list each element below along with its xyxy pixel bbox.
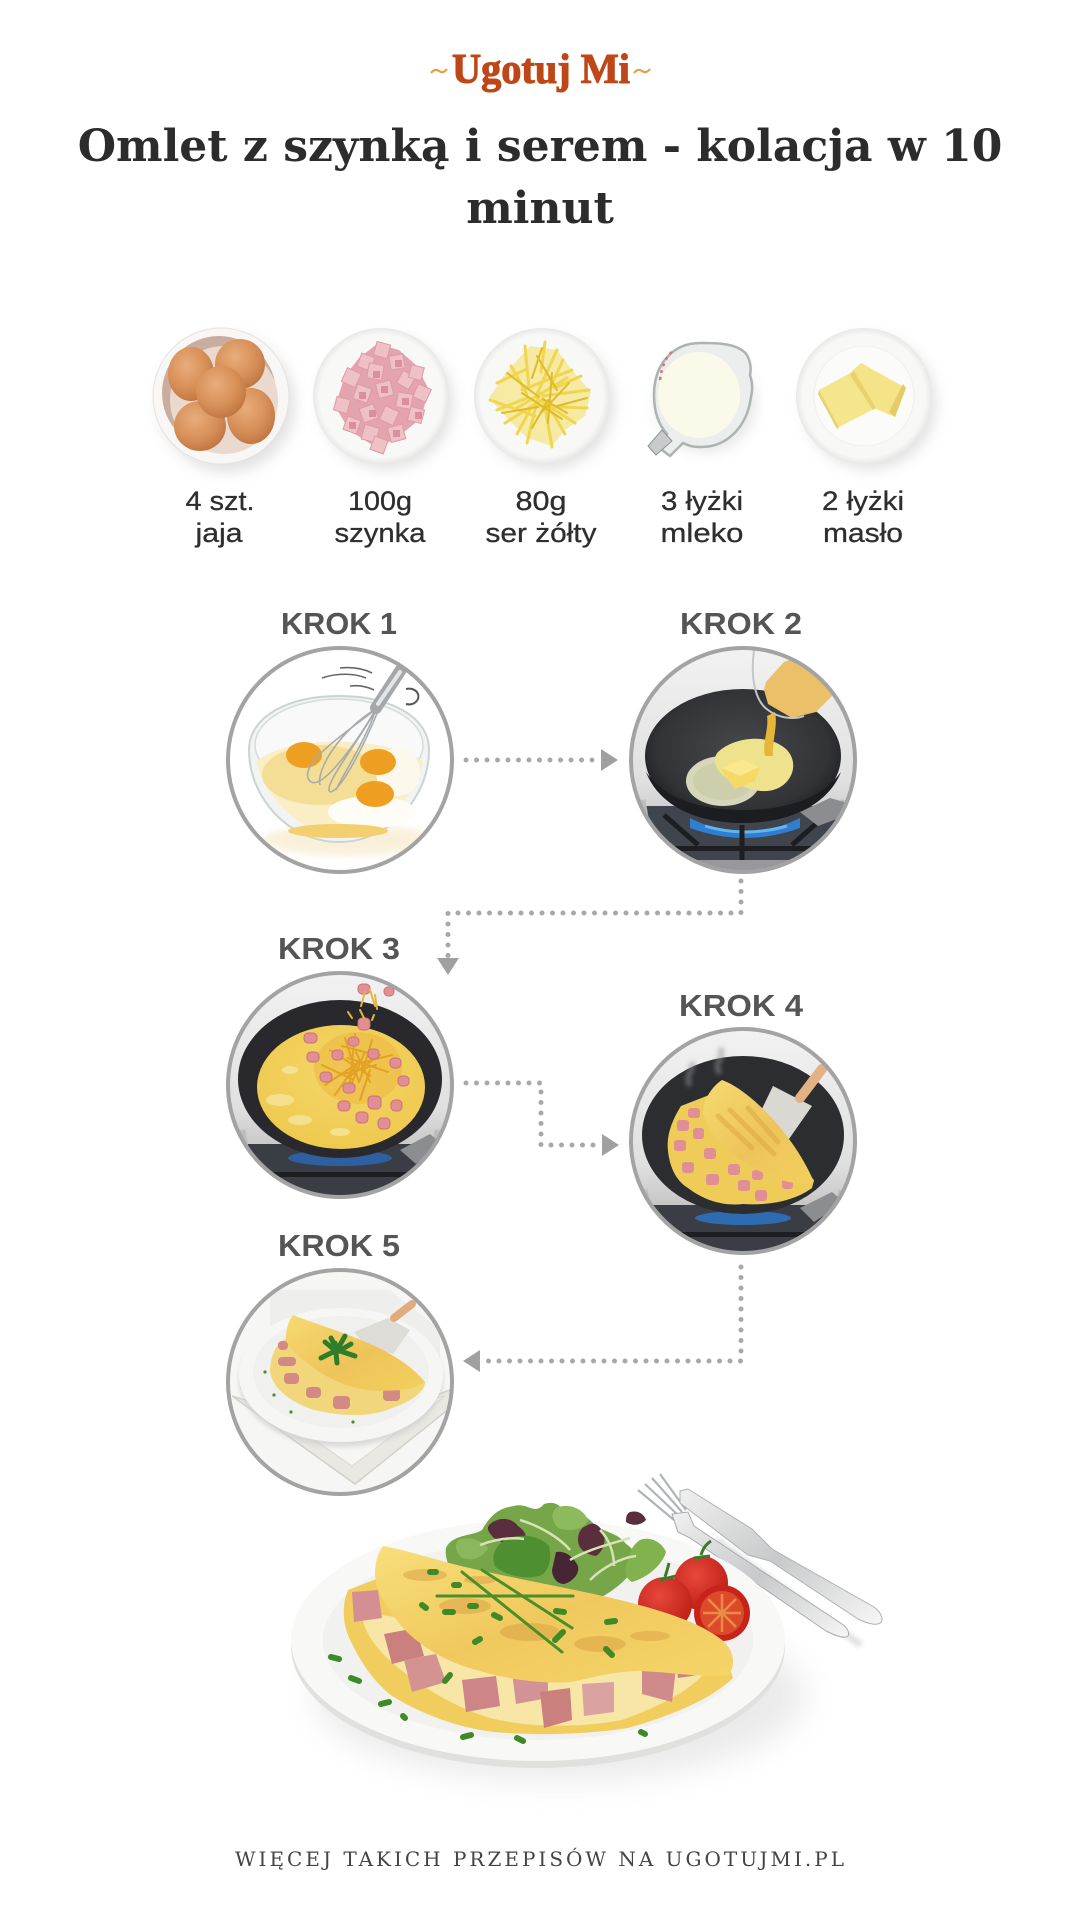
step 2: pouring into pan [630, 647, 856, 874]
label: ham amount: 100g [348, 486, 412, 516]
ingredients panel [153, 328, 936, 548]
ingredient labels [186, 486, 904, 548]
arrow: step 4 to step 5 [463, 1267, 741, 1372]
final dish [291, 1474, 882, 1780]
label: milk amount: 3 łyżki [661, 486, 743, 516]
label: KROK 1: KROK 1 [281, 606, 397, 641]
chives [437, 1570, 573, 1652]
step labels [278, 606, 804, 1263]
label: eggs: 4 szt. [186, 486, 254, 516]
label: butter amount: 2 łyżki [822, 486, 904, 516]
arrow: step 2 to step 3 [437, 881, 741, 975]
logo left swash [431, 69, 447, 73]
label: mleko: mleko [660, 518, 744, 548]
dish shadow [315, 1610, 805, 1780]
title: minut [466, 183, 614, 234]
label: masło: masło [823, 518, 903, 548]
logo right swash [634, 69, 650, 73]
label: KROK 2: KROK 2 [680, 606, 802, 641]
fork [638, 1474, 861, 1645]
ingredient: ham [313, 328, 453, 469]
arrow: step 3 to step 4 [466, 1083, 619, 1156]
label: ser żółty: ser żółty [486, 518, 597, 548]
footer: WIĘCEJ TAKICH PRZEPISÓW NA UGOTUJMI.PL [235, 1846, 847, 1871]
salad [446, 1503, 666, 1602]
ingredient: butter [796, 328, 936, 469]
label: KROK 5: KROK 5 [278, 1228, 400, 1263]
step 5: plated omelette [228, 1270, 454, 1496]
label: cheese amount: 80g [516, 486, 566, 516]
ingredient: cheese [474, 328, 614, 469]
step 4: folding omelette [630, 1028, 856, 1255]
logo wordmark: Ugotuj Mi [452, 47, 630, 93]
plate [291, 1519, 785, 1768]
ingredient: milk [648, 343, 756, 456]
omelette [331, 1546, 733, 1741]
label: szynka: szynka [334, 518, 427, 548]
knife [680, 1489, 882, 1624]
label: KROK 4: KROK 4 [679, 988, 804, 1023]
ingredient: eggs [153, 328, 295, 472]
tomatoes [638, 1541, 750, 1641]
title: Omlet z szynką i serem - kolacja w 10 [78, 121, 1002, 172]
logo [431, 47, 650, 93]
label: KROK 3: KROK 3 [278, 931, 400, 966]
arrow: step 1 to step 2 [466, 749, 618, 771]
step 3: adding ham and cheese [228, 972, 454, 1198]
ham cubes [352, 1590, 382, 1622]
step 1: whisking eggs [228, 648, 452, 872]
label: jaja: jaja [194, 518, 244, 548]
